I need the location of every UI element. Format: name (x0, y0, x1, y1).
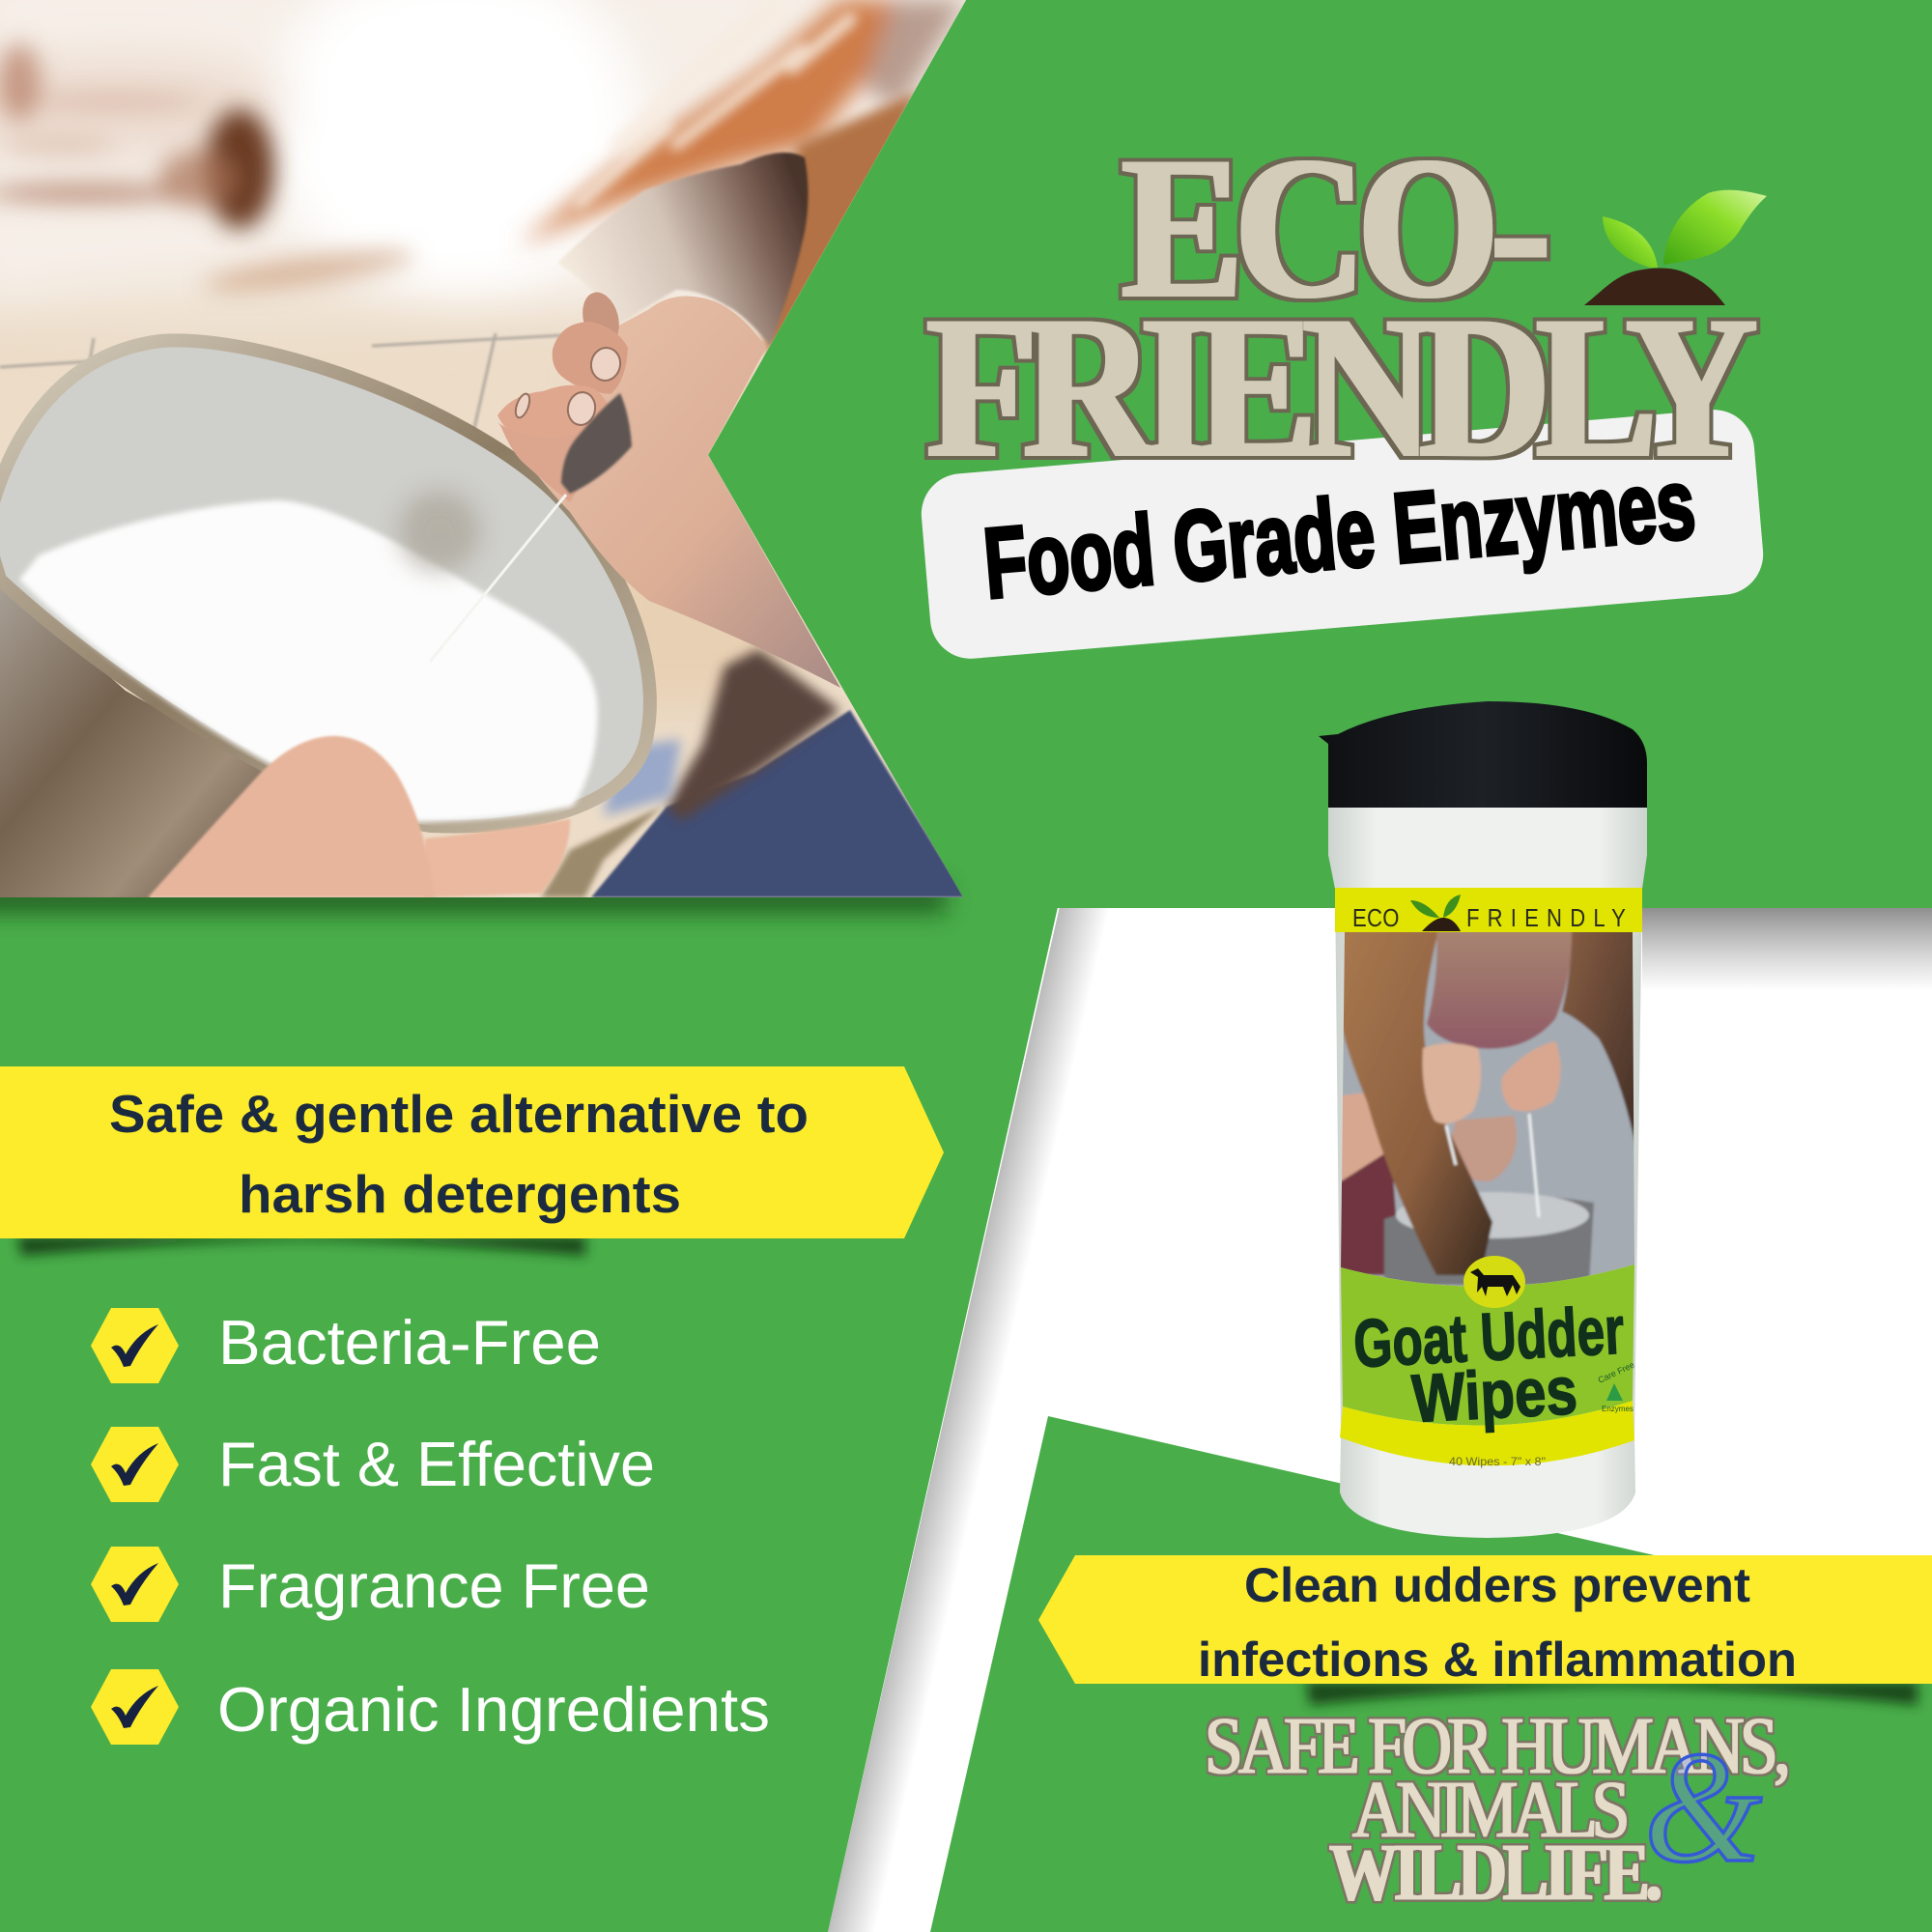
shadow below the photo (0, 884, 947, 913)
fur highlights (580, 10, 850, 203)
fingers holding bowl (425, 819, 570, 897)
woven pattern (541, 807, 662, 897)
lap navy (591, 710, 966, 897)
teat (561, 393, 632, 494)
item: bacteria-free: Bacteria-Free (218, 1307, 601, 1378)
fingernails (513, 346, 623, 427)
shadow under right banner (1306, 1682, 1918, 1705)
script ampersand: & (1644, 1719, 1762, 1895)
eco friendly label band (1335, 888, 1642, 932)
bottle shoulder (1328, 800, 1647, 889)
slogan line two: ANIMALS (1352, 1765, 1630, 1854)
banner: clean udders (1038, 1555, 1932, 1687)
product name (1351, 1293, 1626, 1436)
photo: hand milking a goat into a steel bowl (0, 0, 1005, 897)
product name: Wipes (1410, 1352, 1579, 1436)
finger lower (497, 385, 611, 438)
title word friendly: FRIENDLY (926, 275, 1757, 499)
goat badge (1463, 1256, 1525, 1308)
title word eco: ECO- (1122, 116, 1551, 340)
bowl exterior (0, 580, 270, 897)
shadow under left banner (17, 1236, 585, 1256)
item: organic ingredients: Organic Ingredients (217, 1674, 770, 1745)
orange fur behind teat (763, 92, 918, 353)
shadow on white strip beside the list panel (828, 906, 1113, 1932)
bottle cap (1319, 701, 1647, 808)
slogan line three: WILDLIFE. (1329, 1828, 1662, 1917)
blue fabric (604, 739, 681, 816)
forearm and palm (497, 297, 840, 688)
item: fast and effective: Fast & Effective (218, 1429, 655, 1499)
title: eco-friendly (926, 116, 1757, 499)
green panel: top right (708, 0, 1932, 908)
banner line one: Safe & gentle alternative to (109, 1084, 809, 1144)
care free logo: Enzymes (1602, 1405, 1634, 1413)
thumb knuckle (582, 292, 619, 334)
milking photo on label (1341, 932, 1634, 1287)
bowl with rim and interior (0, 340, 650, 827)
white tilted label (918, 407, 1767, 662)
finger upper (553, 322, 628, 394)
item: bacteria-free (91, 1307, 601, 1383)
milk (19, 491, 598, 823)
thumb holding bowl (148, 736, 435, 897)
bottle lower body (1335, 884, 1642, 1538)
eco friendly label band: ECO (1352, 904, 1399, 932)
green title band (1341, 1264, 1634, 1426)
product: goat udder wipes bottle (1319, 701, 1647, 1538)
fur smudges (0, 0, 966, 298)
lower palm (500, 425, 578, 502)
item: fragrance free: Fragrance Free (218, 1550, 650, 1621)
banner line two: infections & inflammation (1198, 1633, 1797, 1687)
care free logo (1597, 1360, 1636, 1413)
wipes count: 40 Wipes - 7" x 8" (1449, 1455, 1546, 1468)
product name: Goat Udder (1351, 1293, 1626, 1381)
banner: safe and gentle alternative (0, 1066, 944, 1238)
wire fence (0, 332, 561, 428)
yellow base band (1340, 1401, 1634, 1465)
green panel: lower left (0, 894, 1060, 1932)
shadow below top green panel (1642, 906, 1932, 991)
banner line one: Clean udders prevent (1244, 1558, 1750, 1612)
milk stream (430, 495, 566, 662)
eco friendly label band: FRIENDLY (1466, 904, 1626, 932)
slogan line one: SAFE FOR HUMANS, (1205, 1701, 1791, 1790)
goat leg (667, 649, 840, 821)
callout: food grade enzymes (918, 407, 1767, 662)
banner line two: harsh detergents (239, 1164, 681, 1224)
teat fur (557, 153, 808, 345)
green panel: lower right (930, 1416, 1932, 1932)
icon: sprout (1584, 190, 1767, 305)
checklist (91, 1307, 770, 1745)
care free logo: Care Free (1597, 1360, 1636, 1385)
slogan: safe for humans, animals and wildlife (1205, 1701, 1791, 1917)
